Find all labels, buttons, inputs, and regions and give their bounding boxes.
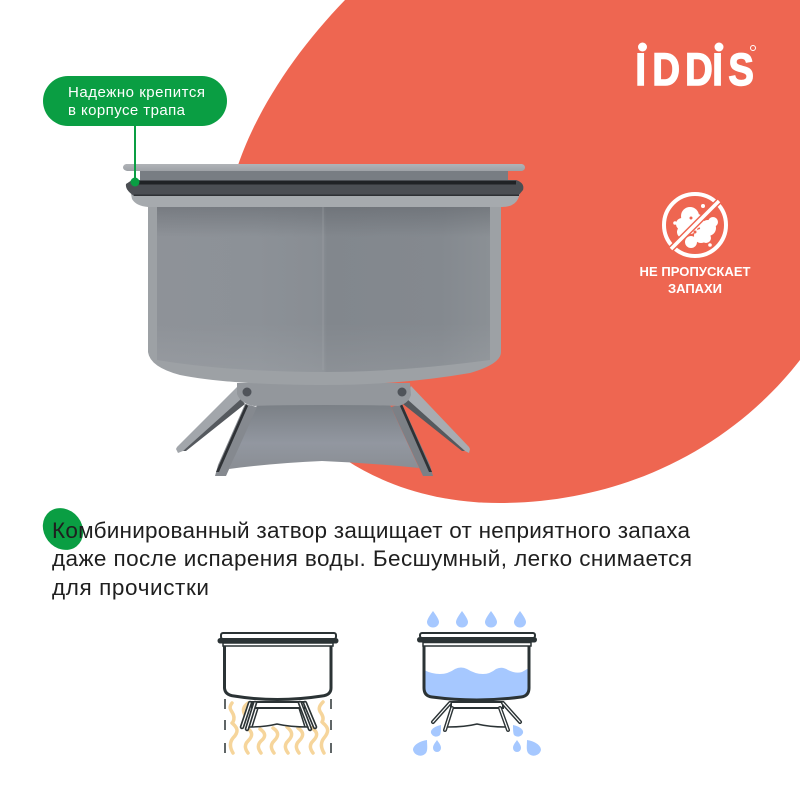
diagram: water seal [413, 611, 541, 756]
seam [322, 207, 324, 370]
description text: даже после испарения воды. Бесшумный, легко снимается [52, 546, 692, 571]
lid [123, 164, 525, 171]
callout: securely fastened [43, 76, 227, 186]
label: does not let odours through: НЕ ПРОПУСКАЕТ [640, 264, 751, 279]
product: drain trap [123, 164, 525, 476]
icon: no odours [664, 194, 726, 256]
trap outline [418, 633, 536, 730]
label: does not let odours through [640, 264, 751, 296]
callout: securely fastened: Надежно крепится [68, 84, 205, 101]
dashed guides [225, 699, 331, 753]
neck [237, 383, 411, 406]
water [424, 668, 529, 700]
logo: iDDIS: IDDIS [635, 44, 754, 95]
right flap [405, 386, 470, 453]
cup body outer rim [148, 204, 501, 385]
falling drops left [413, 725, 441, 756]
description text [52, 518, 692, 600]
callout: securely fastened: в корпусе трапа [68, 102, 186, 119]
centre trapezoid [229, 405, 419, 469]
side struts [215, 404, 257, 476]
description text: для прочистки [52, 575, 209, 600]
top drops [427, 611, 526, 628]
inner collar [140, 171, 508, 181]
odour waves [230, 702, 328, 753]
coral background shape [225, 0, 800, 503]
label: does not let odours through: ЗАПАХИ [668, 281, 722, 296]
cup body inner [157, 207, 490, 372]
falling drops right [513, 725, 541, 756]
sealing ring [126, 180, 523, 196]
green accent blob [34, 500, 92, 558]
description text: Комбинированный затвор защищает от неприятного запаха [52, 518, 690, 543]
trap outline [218, 633, 338, 729]
lower flange [131, 194, 520, 207]
diagram: odours blocked [218, 633, 338, 753]
left flap [176, 387, 243, 453]
